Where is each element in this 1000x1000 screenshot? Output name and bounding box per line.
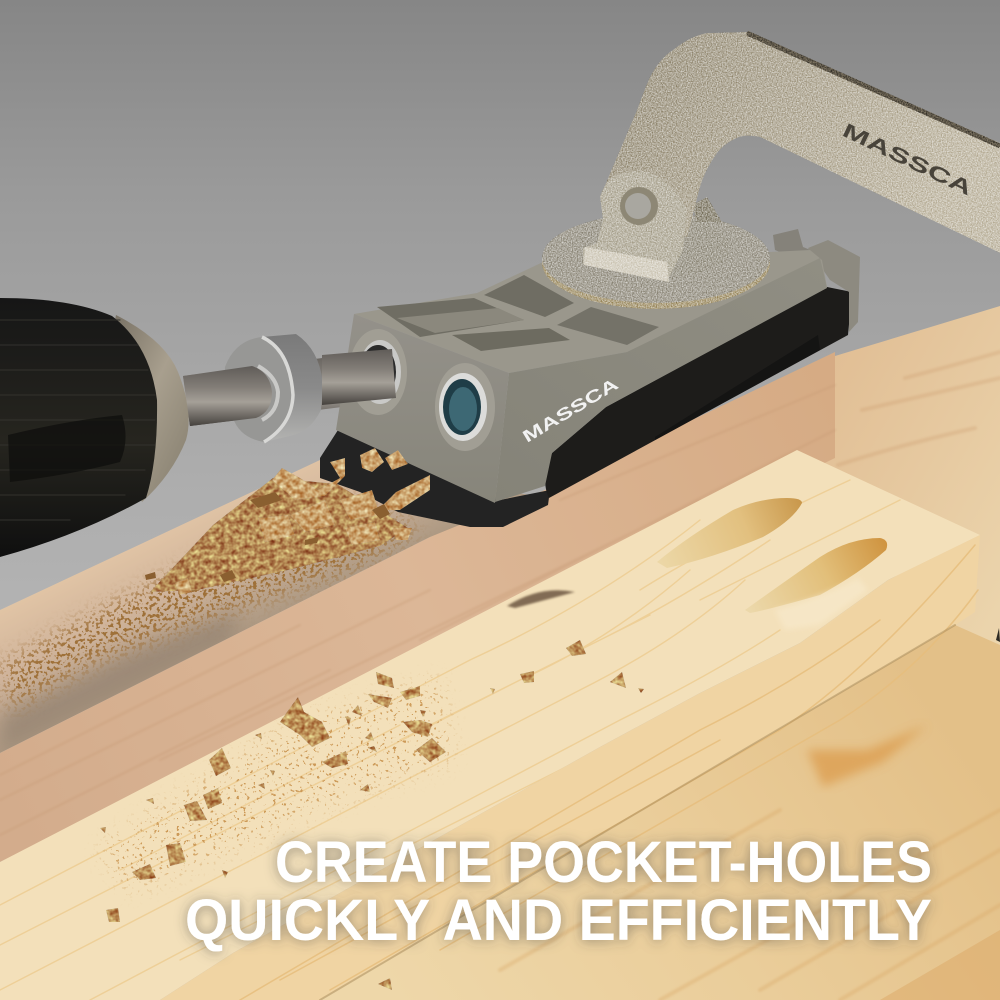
- shavings, dark: [145, 492, 390, 582]
- left drill guide hole: [349, 329, 407, 415]
- pivot pin: [620, 187, 658, 225]
- drill bit shaft: [183, 349, 398, 426]
- scattered dust: [0, 495, 420, 710]
- stop collar on drill bit: [183, 334, 323, 442]
- top recesses: [377, 298, 524, 337]
- black rail along the jig: [545, 287, 852, 498]
- headline: QUICKLY AND EFFICIENTLY: [185, 888, 932, 953]
- loose shavings on board: [100, 640, 644, 990]
- end tabs: [773, 229, 830, 265]
- side face: [495, 258, 827, 502]
- black base plate: [320, 430, 550, 527]
- clamp pad: [542, 213, 770, 303]
- top face: [354, 250, 827, 373]
- board top face: [0, 450, 980, 1000]
- clamp logo: MASSCA: [839, 120, 976, 200]
- lower wood table: [320, 625, 1000, 1000]
- dense pile: [150, 478, 408, 592]
- beam front face: [0, 352, 835, 862]
- back wood table: [800, 306, 1000, 660]
- clamp top edge: [747, 33, 1000, 146]
- clamp arm: [600, 32, 1000, 253]
- clamp pad rim: [542, 217, 770, 309]
- beam top face: [0, 460, 560, 753]
- fine dust on board: [100, 680, 450, 890]
- drill: chuck and collar: [0, 298, 189, 557]
- jig logo: MASSCA: [519, 375, 622, 446]
- crumbled wood below lower pocket: [775, 578, 868, 630]
- front face: [336, 314, 509, 503]
- clamp: [542, 32, 1000, 309]
- clamp foot yoke: [583, 171, 687, 281]
- shavings, light: [175, 448, 430, 595]
- right drill guide hole: [435, 363, 495, 451]
- clamp foot bar: [584, 247, 669, 282]
- sawdust pile on beam: [145, 448, 430, 595]
- pocket hole lower: [745, 538, 887, 613]
- wooden beam under the jig: [0, 352, 835, 862]
- board side face: [160, 535, 980, 1000]
- headline: [185, 830, 932, 953]
- pocket-hole jig body: [336, 229, 860, 503]
- bit inserted into left hole: [322, 349, 396, 405]
- pocket hole upper: [657, 498, 802, 568]
- headline: CREATE POCKET-HOLES: [275, 830, 932, 895]
- foreground board with pocket holes: [0, 450, 980, 1000]
- dark knot: [507, 590, 575, 608]
